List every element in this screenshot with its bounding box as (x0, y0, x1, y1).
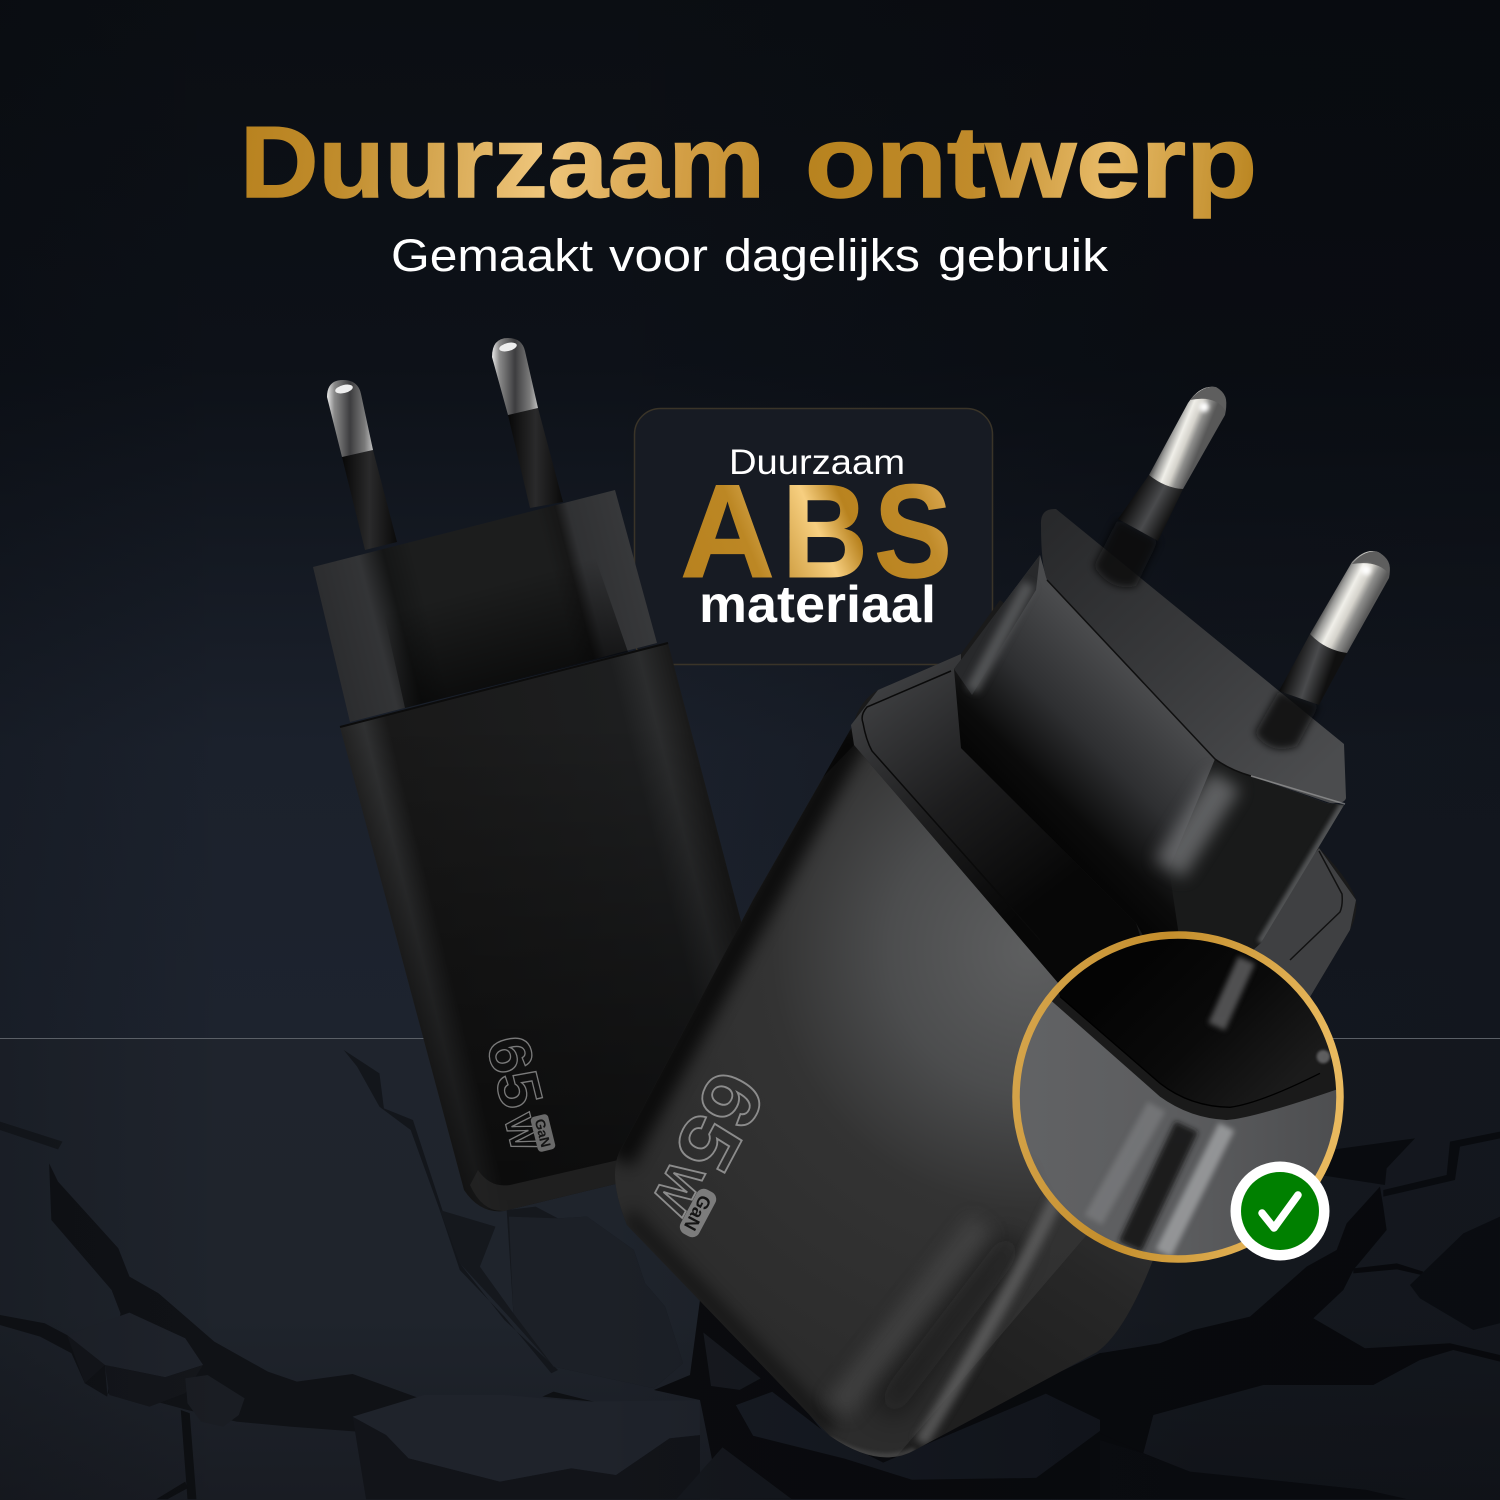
right charger head (954, 555, 1344, 950)
left charger logo: 65W GaN: 65 (473, 1029, 556, 1115)
left charger pins (327, 338, 563, 550)
right charger logo: 65W GaN: 65 (656, 1057, 782, 1186)
title (240, 107, 1257, 219)
icon: check badge (1230, 1162, 1330, 1260)
label: ABS: B (782, 458, 868, 606)
label: ABS (680, 458, 952, 606)
magnifier circle (1012, 931, 1344, 1263)
subtitle: dagelijks (724, 230, 920, 281)
subtitle: Gemaakt (391, 230, 594, 281)
label: ABS: S (874, 458, 952, 606)
right charger logo: 65W GaN (639, 1057, 782, 1240)
right charger pins (1094, 387, 1390, 749)
subtitle: voor (609, 230, 708, 281)
label: Duurzaam: Duurzaam (729, 443, 905, 482)
panel: ABS material (634, 408, 992, 664)
left charger logo: 65W GaN: GaN (532, 1117, 554, 1149)
label: ABS: A (680, 458, 775, 606)
right charger logo: 65W GaN: GaN (680, 1192, 715, 1234)
title: Duurzaam (240, 107, 765, 219)
label: materiaal: materiaal (699, 576, 936, 634)
right charger logo: 65W GaN: W (639, 1151, 715, 1224)
title: ontwerp (805, 107, 1257, 219)
subtitle: gebruik (938, 230, 1109, 281)
magnifier ring (1016, 935, 1340, 1259)
left charger logo: 65W GaN (473, 1029, 556, 1155)
left charger head (313, 490, 657, 722)
right charger rim (851, 654, 1200, 1120)
left charger (313, 338, 742, 1211)
right charger silhouette and faces (615, 600, 1356, 1458)
right charger (600, 387, 1400, 1500)
subtitle (391, 230, 1109, 281)
left charger body (340, 643, 742, 1211)
right charger pin plate (1041, 509, 1346, 803)
left charger logo: 65W GaN: W (495, 1110, 545, 1155)
